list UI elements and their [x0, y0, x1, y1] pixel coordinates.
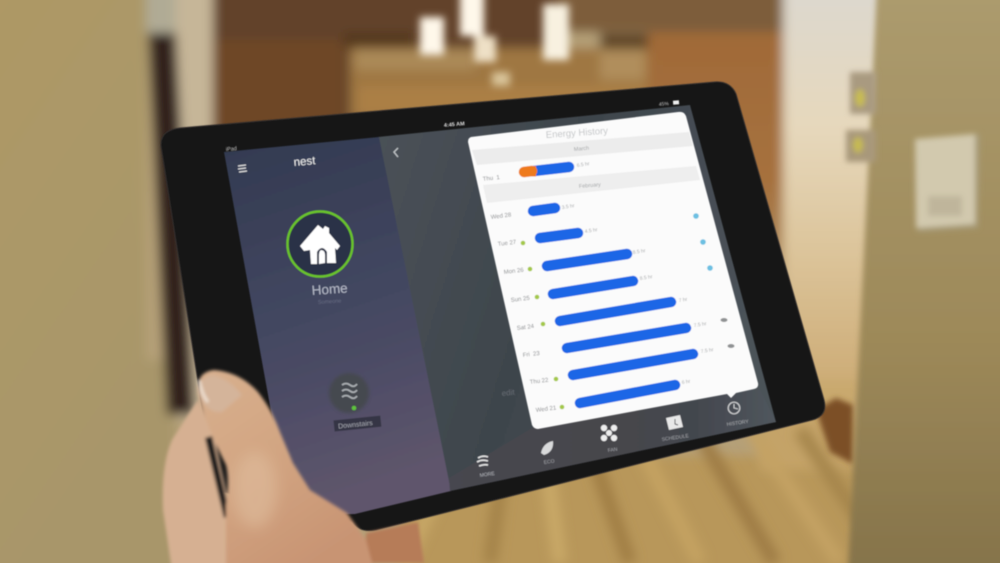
Sat 24 bar [560, 302, 671, 321]
pendant lights [420, 0, 569, 86]
day labels: Tue 27 [498, 240, 517, 248]
Thu 1 bar with orange segment [524, 166, 569, 176]
usage value labels [561, 161, 714, 386]
upper wall panel [850, 72, 876, 114]
day labels: Sat 24 [517, 324, 535, 332]
home status ring [288, 212, 352, 276]
day labels: Mon 26 [504, 268, 525, 276]
downstairs label: Downstairs [338, 420, 374, 431]
nav: eco: ECO [543, 459, 555, 466]
Sun 25 bar [553, 281, 633, 294]
knuckle light [233, 452, 277, 528]
usage value labels: 7.5 hr [693, 321, 707, 329]
day labels: Thu 22 [530, 378, 549, 386]
nav: history [726, 402, 750, 428]
right wall [848, 0, 1000, 563]
menu icon [238, 165, 247, 172]
usage value labels: 3.5 hr [561, 203, 575, 211]
left sidebar [224, 137, 451, 516]
Mon 26 bar [547, 254, 627, 266]
usage value labels: 6 hr [681, 379, 691, 386]
nav: fan [601, 425, 618, 454]
usage value labels: 7 hr [678, 297, 688, 304]
right wood wall [648, 32, 783, 282]
usage value labels: 8.5 hr [632, 248, 646, 256]
wall panels and light switch [846, 72, 980, 232]
nav: more: MORE [479, 471, 496, 479]
nav: more [477, 456, 496, 479]
tablet [161, 82, 825, 531]
cream door frame [176, 0, 214, 420]
hand holding the tablet [163, 370, 424, 563]
faint hidden text behind popover: edit [501, 388, 516, 398]
usage value labels: 6.5 hr [576, 161, 590, 169]
section band label: March: March [574, 146, 589, 153]
status bar: battery: 45% [659, 101, 670, 108]
downstairs label [334, 416, 381, 431]
light switch plate [915, 134, 980, 232]
dark strip [148, 33, 195, 415]
thumbnail highlight [198, 375, 242, 412]
blurred floor planks [405, 428, 860, 563]
status bar: battery [659, 100, 679, 108]
usage value labels: 7.5 hr [700, 347, 714, 355]
day labels: Fri 23 [523, 351, 541, 359]
icon: heat waves [342, 384, 357, 398]
lower wall panel [846, 130, 876, 162]
Fri 23 bar [567, 328, 686, 348]
white wall right of the corridor [783, 0, 883, 400]
day labels: Wed 21 [536, 405, 557, 414]
left wall [0, 0, 146, 563]
bottom navigation bar [449, 386, 776, 491]
popover title: Energy History [545, 126, 609, 141]
day labels: Thu 1 [483, 175, 501, 183]
Thu 22 bar [573, 354, 693, 375]
tablet body [161, 82, 825, 531]
home label: Home [311, 281, 348, 298]
Wed 21 bar [580, 385, 675, 403]
Wed 28 bar [533, 208, 555, 211]
nav: schedule [661, 415, 690, 443]
section band: month [472, 132, 693, 165]
tablet edge behind fingers [205, 436, 230, 518]
brown furniture patch [816, 398, 853, 464]
floor [400, 455, 870, 563]
nav: eco [541, 441, 555, 466]
right app background [378, 105, 776, 491]
section band: previous month [483, 166, 700, 203]
ceiling and wooden wall [213, 0, 558, 130]
day labels [483, 175, 557, 414]
day labels: Sun 25 [511, 296, 531, 304]
back arrow [394, 148, 398, 157]
status bar: clock: 4:45 AM [444, 121, 465, 129]
nav: fan: FAN [607, 447, 618, 454]
nail edge glint [199, 380, 208, 402]
popover card [468, 112, 758, 429]
home sublabel: Someone [318, 298, 342, 306]
green leaf markers [521, 241, 564, 409]
section band label: February: February [579, 182, 601, 190]
cloud weather markers [720, 318, 734, 348]
usage value labels: 8.5 hr [639, 274, 653, 282]
day labels: Wed 28 [491, 212, 512, 221]
icon: house [300, 225, 340, 264]
Tue 27 bar [540, 233, 578, 238]
nav: history: HISTORY [726, 419, 750, 428]
downstairs thermostat [329, 373, 369, 413]
grey trim above dark strip [146, 0, 178, 34]
tablet screen [224, 100, 776, 516]
usage value labels: 4.5 hr [584, 227, 598, 235]
status bar: iPad: iPad [226, 146, 237, 153]
blue weather markers [693, 213, 713, 271]
back fingers [163, 400, 240, 563]
thumb and palm [198, 370, 374, 563]
energy history bar chart [524, 166, 693, 403]
nav: schedule: SCHEDULE [661, 433, 690, 443]
energy history popover [468, 112, 758, 429]
far shelf and corridor [343, 33, 413, 47]
nest logo: nest [293, 155, 317, 169]
lower finger under the tablet [366, 522, 424, 563]
